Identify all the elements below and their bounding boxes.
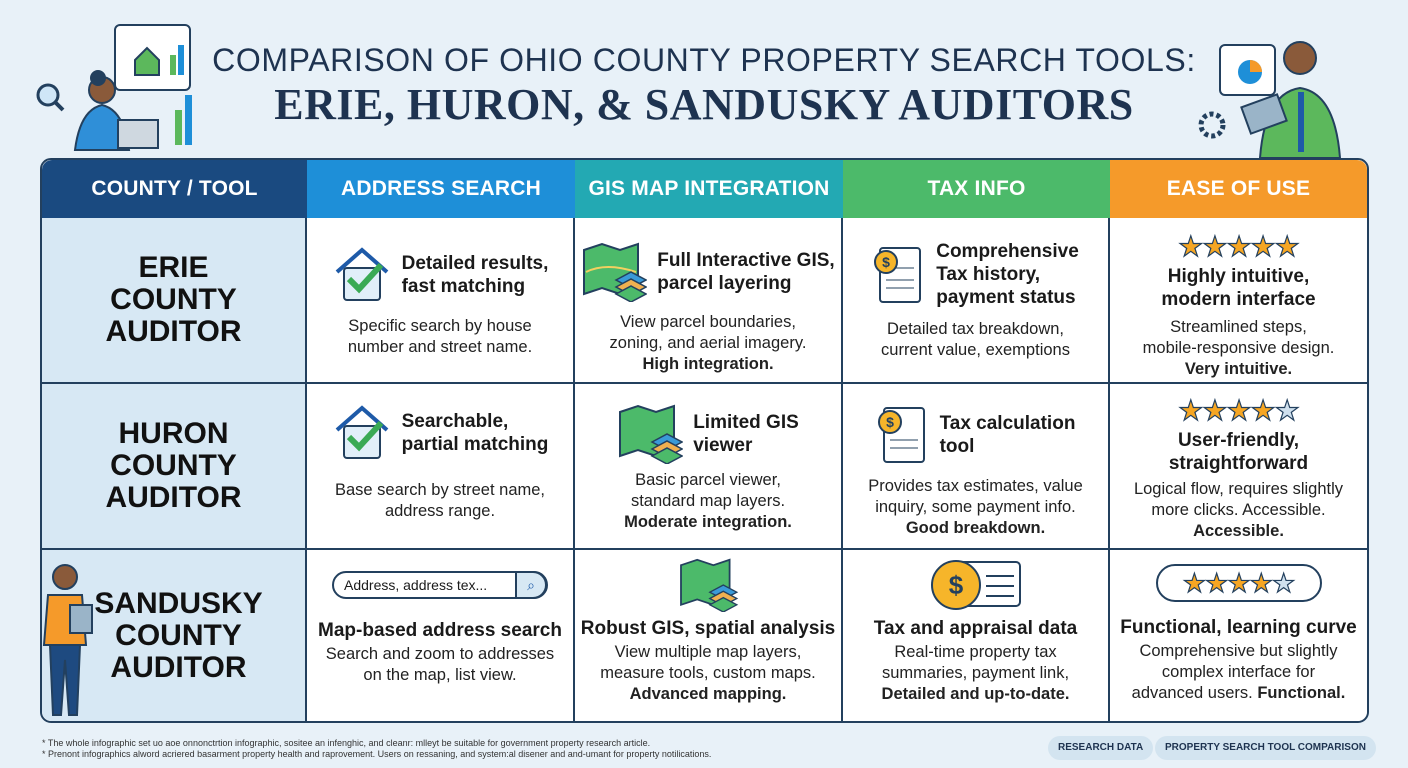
sandusky: tax: Real-time property tax <box>894 643 1057 661</box>
huron: ease: straightforward <box>1169 453 1308 474</box>
erie: tax: Detailed tax breakdown, <box>887 320 1064 338</box>
header: county/tool: COUNTY / TOOL <box>91 177 258 200</box>
erie: tax: Tax history, <box>936 264 1040 285</box>
sandusky: gis: measure tools, custom maps. <box>600 664 816 682</box>
header: GIS map integration <box>575 160 843 218</box>
title: COMPARISON OF OHIO COUNTY PROPERTY SEARCH TOOLS: <box>212 42 1196 78</box>
erie: address: fast matching <box>402 276 525 297</box>
header: ease of use: EASE OF USE <box>1167 177 1310 200</box>
huron: address: Searchable, <box>402 411 508 432</box>
header: address search <box>307 160 575 218</box>
huron: gis: viewer <box>693 435 752 456</box>
sandusky: ease: Functional, learning curve <box>1120 617 1357 638</box>
huron: tax: Tax calculation <box>940 413 1075 434</box>
county: erie: ERIE <box>138 251 209 284</box>
county: huron <box>42 384 307 550</box>
erie: address <box>307 218 575 384</box>
huron: address <box>307 384 575 550</box>
illustration: man with tablet <box>1198 41 1341 158</box>
sandusky: tax: $ <box>948 570 963 600</box>
county: erie <box>42 218 307 384</box>
county: sandusky <box>42 550 307 721</box>
sandusky: address <box>307 550 575 721</box>
erie: address: Specific search by house <box>348 317 532 335</box>
erie: ease <box>1110 218 1367 384</box>
erie: ease: modern interface <box>1161 289 1316 310</box>
tag: research data: RESEARCH DATA <box>1058 742 1143 753</box>
erie: gis: Full Interactive GIS, <box>657 250 835 271</box>
sandusky: address: on the map, list view. <box>363 666 517 684</box>
huron: address: Base search by street name, <box>335 481 545 499</box>
huron: tax: $ <box>886 414 894 430</box>
erie: ease: ★★★★★ <box>1178 231 1299 262</box>
erie: ease: Very intuitive. <box>1185 360 1292 378</box>
huron: tax: inquiry, some payment info. <box>875 498 1076 516</box>
county: sandusky: AUDITOR <box>110 650 247 684</box>
tag: property search tool comparison <box>1155 736 1376 760</box>
header: tax info: TAX INFO <box>927 177 1026 200</box>
erie: tax <box>843 218 1110 384</box>
erie: gis: zoning, and aerial imagery. <box>610 334 806 352</box>
huron: tax <box>843 384 1110 550</box>
sandusky: tax: Detailed and up-to-date. <box>882 685 1069 703</box>
sandusky: ease: Comprehensive but slightly <box>1139 642 1338 660</box>
header: tax info <box>843 160 1110 218</box>
sandusky: address: Address, address tex... <box>344 577 487 593</box>
huron: address: partial matching <box>402 434 548 455</box>
header: county/tool <box>42 160 307 218</box>
sandusky: address: Map-based address search <box>318 620 562 641</box>
table frame <box>40 158 1369 723</box>
county: huron: AUDITOR <box>105 481 242 514</box>
footnotes <box>42 738 711 759</box>
erie: gis <box>575 218 843 384</box>
tag: research data <box>1048 736 1153 760</box>
huron: address: address range. <box>385 502 495 520</box>
illustration: woman with tablet <box>42 564 93 716</box>
erie: address: Detailed results, <box>402 253 548 274</box>
huron: ease: Accessible. <box>1193 522 1284 540</box>
sandusky: ease: advanced users. Functional. <box>1132 684 1345 702</box>
erie: gis: View parcel boundaries, <box>620 313 796 331</box>
sandusky: gis: Advanced mapping. <box>630 685 786 703</box>
huron: tax: tool <box>940 436 974 457</box>
county: erie: AUDITOR <box>105 315 242 348</box>
footnotes: * Prenont infographics alword acriered basarment property health and raprovement. Users on ressaning, and system:al disener and and-umant for property notilications. <box>42 749 711 759</box>
footnotes: * The whole infographic set uo aoe onnonctrtion infographic, sositee an infenghic, and cleanr: mlleyt be suitable for government property research article. <box>42 738 650 748</box>
huron: gis <box>575 384 843 550</box>
sandusky: gis: Robust GIS, spatial analysis <box>581 618 835 639</box>
county: sandusky: SANDUSKY <box>94 586 263 620</box>
huron: ease: more clicks. Accessible. <box>1151 501 1326 519</box>
huron: ease <box>1110 384 1367 550</box>
sandusky: address: Search and zoom to addresses <box>326 645 554 663</box>
erie: tax: $ <box>882 254 890 270</box>
erie: gis: High integration. <box>642 355 774 373</box>
title: ERIE, HURON, & SANDUSKY AUDITORS <box>274 80 1134 129</box>
huron: gis: Limited GIS <box>693 412 799 433</box>
county: huron: COUNTY <box>110 449 237 482</box>
header: ease of use <box>1110 160 1367 218</box>
county: erie: COUNTY <box>110 283 237 316</box>
tag: property search tool comparison: PROPERTY SEARCH TOOL COMPARISON <box>1165 742 1366 753</box>
huron: tax: Good breakdown. <box>906 519 1045 537</box>
erie: ease: Streamlined steps, <box>1170 318 1307 336</box>
county: huron: HURON <box>118 417 228 450</box>
erie: tax: Comprehensive <box>936 241 1079 262</box>
sandusky: tax: Tax and appraisal data <box>874 618 1077 639</box>
erie: gis: parcel layering <box>657 273 791 294</box>
sandusky: ease: complex interface for <box>1162 663 1315 681</box>
erie: address: number and street name. <box>348 338 532 356</box>
huron: ease: Logical flow, requires slightly <box>1134 480 1343 498</box>
header: GIS map integration: GIS MAP INTEGRATION <box>588 177 830 200</box>
sandusky: gis <box>575 550 843 721</box>
erie: tax: payment status <box>936 287 1076 308</box>
sandusky: address: ⌕ <box>527 577 535 593</box>
header: address search: ADDRESS SEARCH <box>341 177 541 200</box>
county: sandusky: COUNTY <box>115 618 242 652</box>
huron: gis: standard map layers. <box>631 492 785 510</box>
erie: ease: Highly intuitive, <box>1168 266 1309 287</box>
sandusky: ease: ★★★★★ <box>1183 568 1294 598</box>
title <box>212 42 1196 129</box>
erie: ease: mobile-responsive design. <box>1143 339 1334 357</box>
huron: ease: User-friendly, <box>1178 430 1299 451</box>
sandusky: tax <box>843 550 1110 721</box>
sandusky: ease <box>1110 550 1367 721</box>
huron: gis: Basic parcel viewer, <box>635 471 781 489</box>
huron: tax: Provides tax estimates, value <box>868 477 1083 495</box>
huron: ease: ★★★★★ <box>1178 395 1299 426</box>
erie: tax: current value, exemptions <box>881 341 1070 359</box>
huron: gis: Moderate integration. <box>624 513 792 531</box>
sandusky: tax: summaries, payment link, <box>882 664 1069 682</box>
illustration: woman with laptop <box>36 24 192 151</box>
sandusky: gis: View multiple map layers, <box>615 643 801 661</box>
